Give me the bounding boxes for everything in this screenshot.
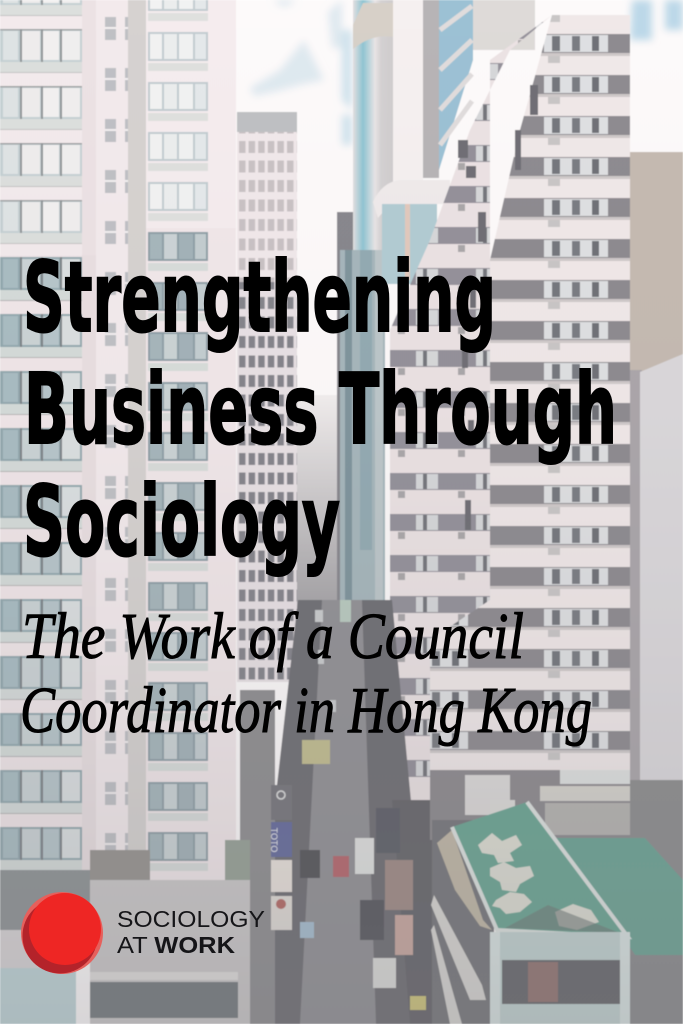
logo text	[117, 906, 265, 958]
right teal roof	[555, 838, 683, 962]
side wall with small windows	[96, 0, 130, 880]
dark right pavement	[392, 800, 432, 1024]
dark far tower	[337, 212, 353, 602]
cylinder tower cap	[353, 3, 393, 49]
building behind roof	[430, 770, 630, 840]
title line 3: Sociology	[23, 465, 340, 578]
title	[23, 241, 617, 578]
messy building edge	[458, 85, 538, 530]
right dark trees	[630, 780, 683, 960]
sky clouds	[250, 0, 683, 145]
cylinder tower	[353, 0, 393, 260]
lower blue strips	[340, 250, 385, 600]
centre-left building lower	[146, 228, 236, 880]
far street cars	[302, 600, 351, 764]
shop signs	[269, 785, 292, 930]
left building upper	[0, 0, 96, 260]
centre-left building upper	[146, 0, 236, 228]
roof parapet	[452, 802, 628, 937]
far city haze	[297, 395, 357, 610]
right lower grey building	[630, 354, 683, 840]
left building lower	[0, 255, 96, 880]
roof side balconies	[431, 895, 486, 1024]
beige tower behind	[473, 0, 535, 50]
fire ladder strip	[128, 0, 146, 880]
balcony base	[432, 820, 494, 1024]
logo word: sociology: SOCIOLOGY	[117, 906, 265, 932]
lower left shade building	[240, 690, 275, 1024]
subtitle line 1: The Work of a Council	[22, 600, 524, 673]
roof garden	[452, 802, 628, 937]
right bottom shade	[630, 955, 683, 1024]
roof dark shadow	[505, 905, 620, 933]
slanted edge of striped building	[390, 15, 552, 800]
lower left bush roof	[225, 840, 250, 920]
logo words: at work: AT WORK	[117, 932, 235, 958]
dense window building	[237, 112, 297, 682]
right upper tan building	[630, 152, 683, 382]
lower left building	[0, 850, 250, 1024]
roof chairs	[478, 833, 599, 930]
street canyon	[250, 600, 432, 1024]
logo red circle	[21, 892, 103, 974]
roof building front	[490, 932, 630, 1024]
blue curved tower	[439, 0, 473, 170]
logo: Sociology at Work	[21, 892, 265, 974]
planter wall	[437, 830, 492, 930]
shop signs: TOTO	[269, 828, 279, 852]
white tower	[373, 0, 450, 284]
main striped building	[430, 15, 630, 830]
road surface	[300, 600, 376, 1024]
subtitle	[20, 600, 592, 747]
parked cars	[300, 808, 426, 1010]
